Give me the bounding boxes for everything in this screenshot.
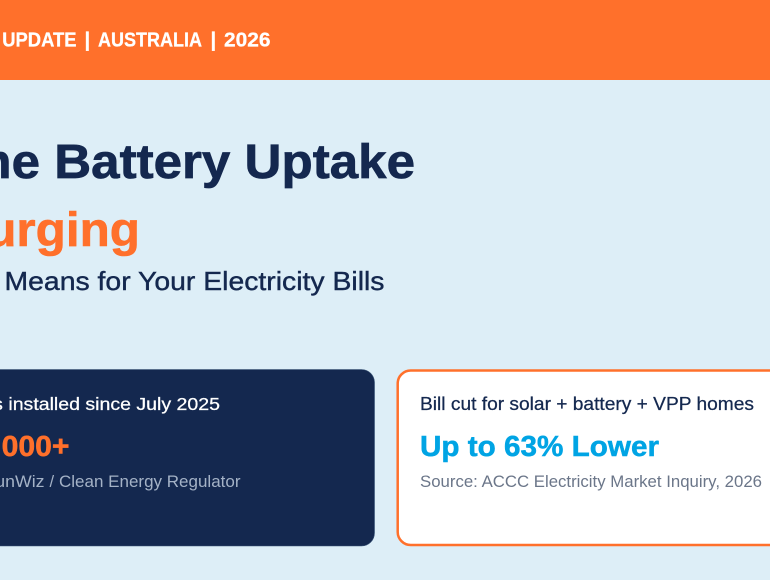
stat source: / [50,473,54,491]
stat value: Up to 63% Lower [420,431,659,463]
panel: bill cut [398,370,770,545]
title [0,134,415,296]
stat source: Source: ACCC Electricity Market Inquiry, 2026 [420,473,762,491]
banner label [0,30,270,52]
banner label: AUSTRALIA [98,30,202,52]
panel: batteries installed [0,370,375,546]
stat label: Bill cut for solar + battery + VPP homes [420,394,754,414]
stat source: Clean Energy Regulator [59,473,241,491]
banner label: | [84,30,90,52]
banner label: | [210,30,216,52]
banner label: 2026 [224,30,270,52]
header banner [0,0,770,80]
subtitle: Means for Your Electricity Bills [4,266,385,296]
